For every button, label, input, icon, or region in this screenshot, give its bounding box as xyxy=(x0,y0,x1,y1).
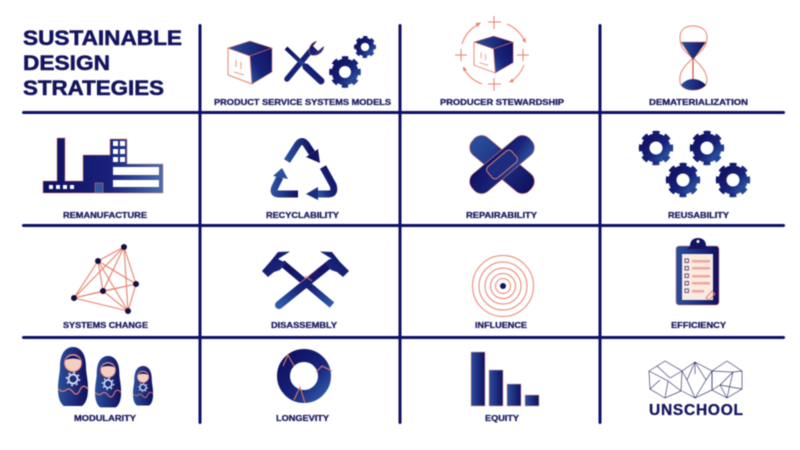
panel: disassembly xyxy=(262,252,349,330)
label: EFFICIENCY xyxy=(671,320,726,330)
icon: box, tools and gears xyxy=(228,36,376,88)
icon: concentric circles xyxy=(472,256,534,316)
icon: nesting dolls xyxy=(58,347,153,407)
title: SUSTAINABLE xyxy=(23,27,182,50)
title: DESIGN xyxy=(23,52,110,75)
label: LONGEVITY xyxy=(276,413,329,423)
label: EQUITY xyxy=(485,413,519,423)
icon: clipboard xyxy=(676,238,719,305)
wordmark: UNSCHOOL xyxy=(649,402,743,419)
icon: crossed bandages xyxy=(465,131,539,198)
icon: hourglass xyxy=(680,26,707,90)
panel: repairability xyxy=(465,131,539,220)
panel: recyclability xyxy=(266,142,339,220)
icon: recycling arrows xyxy=(273,142,334,200)
label: DISASSEMBLY xyxy=(271,320,337,330)
label: PRODUCER STEWARDSHIP xyxy=(440,97,564,107)
icon: network xyxy=(71,244,139,314)
label: REPAIRABILITY xyxy=(466,210,537,220)
panel: influence xyxy=(472,256,534,330)
panel: product service systems models xyxy=(214,36,391,107)
panel: efficiency xyxy=(671,238,726,330)
label: PRODUCT SERVICE SYSTEMS MODELS xyxy=(214,97,391,107)
panel: reusability xyxy=(638,130,751,220)
label: SYSTEMS CHANGE xyxy=(63,320,148,330)
icon: crossed hammers xyxy=(262,252,349,305)
title xyxy=(23,27,182,100)
icon: four gears xyxy=(638,130,751,198)
label: MODULARITY xyxy=(74,413,136,423)
icon: geometric hexagons xyxy=(649,361,742,398)
panel: longevity xyxy=(276,355,332,423)
panel: systems change xyxy=(63,244,148,330)
panel: dematerialization xyxy=(649,26,748,107)
label: INFLUENCE xyxy=(475,320,527,330)
icon: factory xyxy=(43,138,163,193)
label: REMANUFACTURE xyxy=(63,210,147,220)
panel: remanufacture xyxy=(43,138,163,220)
label: RECYCLABILITY xyxy=(266,210,339,220)
icon: descending bars xyxy=(471,352,539,406)
panel: equity xyxy=(471,352,539,423)
panel: modularity xyxy=(58,347,153,423)
panel: producer stewardship xyxy=(440,16,564,107)
icon: box with circular arrows xyxy=(455,16,529,91)
label: DEMATERIALIZATION xyxy=(649,97,748,107)
label: REUSABILITY xyxy=(668,210,729,220)
logo: unschool xyxy=(649,361,743,419)
title: STRATEGIES xyxy=(23,77,164,100)
icon: circular arrows ring xyxy=(283,355,332,403)
